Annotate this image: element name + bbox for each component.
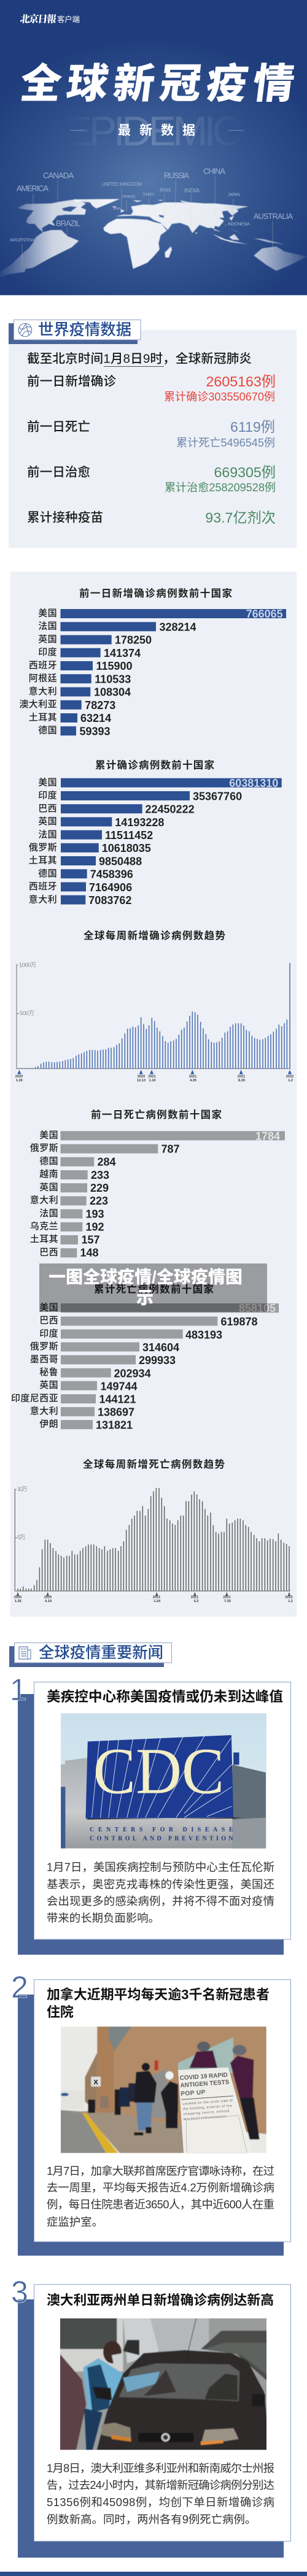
bar chart: cumulative deaths top ten: 巴西 xyxy=(39,1316,58,1326)
photo: CDC sign: CDC xyxy=(93,1735,224,1807)
stat: deaths: 前一日死亡 xyxy=(27,420,90,434)
chart: weekly new cases trend: 4.25 xyxy=(190,1079,196,1083)
bar chart: cumulative cases top ten: 60381310 xyxy=(229,777,278,789)
photo: testing queue: X xyxy=(93,2079,98,2087)
bar chart: daily deaths top ten: 俄罗斯 xyxy=(30,1143,58,1154)
stat: new confirmed: 2605163例 xyxy=(206,374,276,389)
bar chart: daily deaths top ten xyxy=(30,1108,285,1259)
bar chart: cumulative cases top ten: 累计确诊病例数前十国家 xyxy=(95,759,215,771)
chart: weekly deaths trend: 5万 xyxy=(17,1535,26,1541)
chart: weekly deaths trend: 1.24 xyxy=(154,1600,161,1603)
bar chart: daily deaths top ten: 193 xyxy=(86,1208,104,1220)
bar chart: daily new cases top ten: 78273 xyxy=(85,699,115,711)
bar chart: daily deaths top ten: 德国 xyxy=(39,1156,58,1167)
bar chart: cumulative deaths top ten: 英国 xyxy=(39,1380,58,1390)
watermark: EPIDEMIC xyxy=(64,108,243,155)
bar chart: daily deaths top ten: 美国 xyxy=(39,1130,58,1141)
chart: weekly deaths trend: 全球每周新增死亡病例数趋势 xyxy=(83,1458,225,1470)
bar chart: daily new cases top ten: 328214 xyxy=(160,621,196,633)
bar chart: daily new cases top ten: 178250 xyxy=(115,634,152,646)
card title: 澳大利亚两州单日新增确诊病例达新高 xyxy=(47,2293,274,2307)
panel: charts xyxy=(10,572,297,1617)
chart: weekly deaths trend: 1.26 xyxy=(15,1600,21,1603)
card title: 加拿大近期平均每天逾3千名新冠患者 xyxy=(47,1987,270,2002)
bar chart: cumulative cases top ten: 35367760 xyxy=(193,790,242,802)
stat: new confirmed xyxy=(27,374,276,403)
bar chart: daily deaths top ten: 英国 xyxy=(39,1182,58,1192)
logo xyxy=(20,12,80,25)
chart: weekly deaths trend: 7.25 xyxy=(224,1600,231,1603)
bar chart: daily deaths top ten: 229 xyxy=(90,1182,109,1194)
map country labels: RUSSIA xyxy=(164,171,189,180)
bar chart: daily new cases top ten: 西班牙 xyxy=(29,660,57,671)
card body text: 会出现更多的感染病例，并将不得不面对疫情 xyxy=(47,1895,274,1907)
hero banner xyxy=(0,0,307,296)
stat: recovered: 669305例 xyxy=(214,464,276,480)
map country labels: CANADA xyxy=(43,171,74,180)
card body text: 基表示，奥密克戎毒株的传染性更强，美国还 xyxy=(47,1878,274,1890)
chart: weekly new cases trend: 2021 xyxy=(189,1075,196,1078)
bar chart: cumulative deaths top ten xyxy=(11,1283,279,1432)
bar chart: daily new cases top ten: 110533 xyxy=(95,673,131,686)
chart: weekly new cases trend: 2022 xyxy=(286,1075,293,1078)
bar chart: daily new cases top ten: 141374 xyxy=(104,647,141,659)
bar chart: daily deaths top ten: 巴西 xyxy=(39,1247,58,1257)
card title xyxy=(47,1987,270,2020)
bar chart: daily deaths top ten: 前一日死亡病例数前十国家 xyxy=(91,1108,222,1121)
card body text: 症监护室。 xyxy=(47,2215,103,2228)
bar chart: cumulative cases top ten: 7164906 xyxy=(89,881,132,894)
bar chart: daily deaths top ten: 157 xyxy=(81,1234,100,1246)
card title: 住院 xyxy=(47,2004,74,2020)
bar chart: cumulative cases top ten: 14193228 xyxy=(115,816,164,829)
map country labels xyxy=(10,167,293,267)
bar chart: cumulative cases top ten: 西班牙 xyxy=(29,881,57,892)
chart: weekly deaths trend: 2020 xyxy=(44,1596,52,1600)
main title: 全球新冠疫情 xyxy=(18,61,303,107)
bar chart: cumulative deaths top ten: 131821 xyxy=(96,1419,133,1432)
card body text xyxy=(47,2164,274,2228)
bar chart: cumulative cases top ten: 英国 xyxy=(38,816,57,827)
map country labels: JAPAN xyxy=(228,193,240,197)
chart: weekly new cases trend: 1.2 xyxy=(288,1079,293,1083)
stat: new confirmed: 前一日新增确诊 xyxy=(27,374,116,389)
bar chart: daily new cases top ten: 766065 xyxy=(246,608,283,620)
stat: new confirmed: 累计确诊303550670例 xyxy=(164,391,275,403)
stat: vaccines: 累计接种疫苗 xyxy=(27,510,103,525)
card body text: 告，过去24小时内，其新增新冠确诊病例分别达 xyxy=(47,2478,274,2491)
news card 2 xyxy=(11,1970,291,2256)
stat: recovered: 前一日治愈 xyxy=(27,465,90,480)
overlay caption banner: 示 xyxy=(136,1288,154,1308)
map country labels: INDIA xyxy=(184,188,200,194)
bar chart: cumulative cases top ten: 印度 xyxy=(38,791,57,801)
bar chart: cumulative cases top ten: 法国 xyxy=(38,829,57,840)
bar chart: cumulative cases top ten xyxy=(29,759,282,907)
bar chart: daily deaths top ten: 土耳其 xyxy=(30,1234,58,1244)
bar chart: cumulative deaths top ten: 619878 xyxy=(221,1316,258,1328)
stat: vaccines xyxy=(27,510,276,526)
card body text: 例数新高。同时，两州各有9例死亡病例。 xyxy=(47,2513,256,2526)
bar chart: cumulative deaths top ten: 202934 xyxy=(114,1367,151,1379)
chart: weekly new cases trend: 全球每周新增确诊病例数趋势 xyxy=(84,929,226,941)
bar chart: daily deaths top ten: 284 xyxy=(97,1156,116,1168)
date line: 截至北京时间1月8日9时，全球新冠肺炎 xyxy=(27,352,252,366)
stat: deaths: 累计死亡5496545例 xyxy=(176,437,275,449)
card body text xyxy=(47,2462,274,2526)
chart: weekly new cases trend: 2020 xyxy=(15,1075,23,1078)
card number: 1 xyxy=(10,1673,27,1707)
bar chart: daily new cases top ten: 108304 xyxy=(94,686,131,699)
footer bar xyxy=(0,2572,307,2576)
stat: deaths: 6119例 xyxy=(230,419,275,435)
section heading: global news: NEWS xyxy=(20,1648,27,1650)
stat: recovered xyxy=(27,464,276,494)
bar chart: cumulative deaths top ten: 314604 xyxy=(142,1341,179,1354)
map country labels: INDONESIA xyxy=(228,221,250,227)
icon: newspaper xyxy=(19,1647,31,1659)
map country labels: AMERICA xyxy=(17,184,49,193)
card body text: 例，每日住院患者近3650人，其中近600人在重 xyxy=(47,2198,274,2210)
bar chart: cumulative cases top ten: 11511452 xyxy=(105,829,153,841)
stat: deaths xyxy=(27,419,275,449)
bar chart: daily deaths top ten: 1784 xyxy=(255,1130,280,1142)
bar chart: cumulative cases top ten: 意大利 xyxy=(29,894,57,905)
chart: weekly deaths trend: 2022 xyxy=(285,1596,293,1600)
news card 3 xyxy=(11,2275,291,2558)
card body text: 1月7日，美国疾病控制与预防中心主任瓦伦斯 xyxy=(47,1861,274,1873)
bar chart: cumulative deaths top ten: 美国 xyxy=(39,1301,58,1313)
bar chart: daily deaths top ten: 意大利 xyxy=(30,1195,58,1206)
card body text: 51356例和45098例，均创下单日新增确诊病 xyxy=(47,2496,274,2509)
news card 1 xyxy=(10,1673,291,1955)
section heading: global news xyxy=(9,1643,172,1667)
section heading: world data xyxy=(9,320,141,344)
card title: 美疾控中心称美国疫情或仍未到达峰值 xyxy=(47,1689,283,1704)
bar chart: cumulative deaths top ten: 墨西哥 xyxy=(30,1354,58,1365)
card body text: 1月8日，澳大利亚维多利亚州和新南威尔士州报 xyxy=(47,2462,274,2474)
panel: world data xyxy=(9,320,297,548)
photo: testing queue: the building, exterior of the xyxy=(183,2104,232,2111)
chart: weekly deaths trend: 2021 xyxy=(153,1596,160,1600)
bar chart: daily new cases top ten: 澳大利亚 xyxy=(19,699,57,710)
logo: 北京日報 xyxy=(20,12,57,25)
stat: vaccines: 93.7亿剂次 xyxy=(205,510,276,526)
map country labels: BRAZIL xyxy=(56,218,80,228)
bar chart: daily new cases top ten: 土耳其 xyxy=(29,713,57,723)
bar chart: cumulative cases top ten: 美国 xyxy=(38,776,57,788)
bar chart: cumulative deaths top ten: 俄罗斯 xyxy=(30,1341,58,1352)
bar chart: cumulative deaths top ten: 299933 xyxy=(139,1354,176,1367)
photo: testing queue: Marshall's/Homesense. xyxy=(184,2115,228,2122)
chart: weekly new cases trend: 1.26 xyxy=(16,1079,23,1083)
bar chart: daily new cases top ten: 印度 xyxy=(38,647,57,657)
logo: 客户端 xyxy=(57,15,80,24)
chart: weekly deaths trend: 10万 xyxy=(17,1486,28,1493)
world map xyxy=(0,199,307,277)
bar chart: daily deaths top ten: 越南 xyxy=(39,1169,58,1179)
bar chart: daily new cases top ten: 英国 xyxy=(38,634,57,645)
chart: weekly deaths trend: 1.2 xyxy=(288,1600,293,1603)
chart: weekly new cases trend: 1000万 xyxy=(19,962,36,969)
bar chart: cumulative deaths top ten: 秘鲁 xyxy=(39,1367,58,1378)
bar chart: cumulative cases top ten: 9850488 xyxy=(99,855,142,867)
bar chart: cumulative cases top ten: 22450222 xyxy=(145,803,195,816)
bar chart: cumulative deaths top ten: 伊朗 xyxy=(39,1419,58,1429)
bar chart: cumulative deaths top ten: 144121 xyxy=(99,1393,136,1406)
bar chart: daily deaths top ten: 787 xyxy=(161,1143,180,1156)
photo: CDC sign: CONTROL AND PREVENTION xyxy=(90,1836,233,1842)
bar chart: cumulative cases top ten: 7083762 xyxy=(88,894,131,907)
map country labels: IRAN xyxy=(160,188,171,193)
chart: weekly new cases trend: 8.29 xyxy=(238,1079,245,1083)
bar chart: daily deaths top ten: 乌克兰 xyxy=(30,1221,58,1232)
map country labels: UNITED KINGDOM xyxy=(102,182,142,187)
bar chart: daily deaths top ten: 233 xyxy=(91,1169,109,1181)
bar chart: cumulative cases top ten: 土耳其 xyxy=(29,856,57,866)
section heading: world data: 世界疫情数据 xyxy=(38,321,131,339)
card number: 2 xyxy=(11,1970,28,2004)
bar chart: cumulative deaths top ten: 483193 xyxy=(185,1328,222,1341)
bar chart: daily deaths top ten: 法国 xyxy=(39,1208,58,1219)
chart: weekly deaths trend: 4.19 xyxy=(45,1600,52,1603)
bar chart: daily new cases top ten: 前一日新增确诊病例数前十国家 xyxy=(79,587,232,599)
bar chart: daily deaths top ten: 192 xyxy=(86,1221,104,1233)
chart: weekly deaths trend xyxy=(14,1458,293,1603)
bar chart: cumulative cases top ten: 俄罗斯 xyxy=(29,843,57,853)
map country labels: FRANCE xyxy=(122,195,136,199)
overlay caption banner xyxy=(39,1263,267,1312)
bar chart: cumulative cases top ten: 7458396 xyxy=(90,868,133,881)
bar chart: daily new cases top ten: 59393 xyxy=(80,725,111,737)
photo: testing queue: shopping centre, behind xyxy=(183,2109,230,2117)
chart: weekly new cases trend: 12.13 xyxy=(137,1079,146,1083)
chart: weekly deaths trend: 2021 xyxy=(191,1596,198,1600)
section heading: global news: 全球疫情重要新闻 xyxy=(39,1644,163,1662)
chart: weekly new cases trend xyxy=(15,929,293,1083)
card number: 3 xyxy=(11,2275,28,2309)
chart: weekly deaths trend: 2020 xyxy=(14,1596,21,1600)
bar chart: daily new cases top ten: 115900 xyxy=(96,660,133,672)
photo: testing queue xyxy=(61,2026,266,2153)
photo: drive-through testing xyxy=(60,2318,266,2450)
map country labels: CHINA xyxy=(203,167,225,175)
card body text: 去一周里，平均每天报告近4.2万例新增确诊病 xyxy=(47,2181,274,2194)
chart: weekly deaths trend: 2021 xyxy=(223,1596,231,1600)
bar chart: daily deaths top ten: 148 xyxy=(80,1246,99,1259)
chart: weekly new cases trend: 500万 xyxy=(20,1010,34,1017)
bar chart: daily new cases top ten: 德国 xyxy=(38,725,57,736)
photo: CDC sign: CENTERS FOR DISEASE xyxy=(90,1827,233,1833)
chart: weekly deaths trend: 5.2 xyxy=(194,1600,198,1603)
chart: weekly new cases trend: 1.10 xyxy=(149,1079,155,1083)
map country labels: ARGENTINA xyxy=(10,237,35,243)
bar chart: daily new cases top ten: 意大利 xyxy=(29,686,57,697)
bar chart: cumulative deaths top ten: 858105 xyxy=(239,1302,276,1314)
photo: testing queue: POP UP xyxy=(181,2089,206,2098)
bar chart: cumulative cases top ten: 德国 xyxy=(38,868,57,879)
bar chart: cumulative deaths top ten: 意大利 xyxy=(30,1406,58,1417)
bar chart: cumulative deaths top ten: 印度 xyxy=(39,1328,58,1339)
bar chart: daily new cases top ten xyxy=(19,587,286,737)
photo: testing queue: ANTIGEN TESTS xyxy=(180,2079,230,2089)
stat: recovered: 累计治愈258209528例 xyxy=(165,481,276,494)
overlay caption banner: 一图全球疫情/全球疫情图 xyxy=(49,1267,243,1287)
chart: weekly new cases trend: 2021 xyxy=(148,1075,156,1078)
map country labels: SPAIN xyxy=(113,207,121,211)
photo: testing queue: COVID 19 RAPID xyxy=(179,2072,228,2082)
bar chart: daily deaths top ten: 223 xyxy=(90,1195,108,1207)
bar chart: daily new cases top ten: 阿根廷 xyxy=(29,673,57,684)
card body text xyxy=(47,1861,274,1925)
photo: CDC sign xyxy=(61,1713,266,1849)
bar chart: daily new cases top ten: 美国 xyxy=(38,607,57,618)
bar chart: cumulative deaths top ten: 累计死亡病例数前十国家 xyxy=(94,1283,214,1295)
icon: globe xyxy=(18,323,32,337)
bar chart: daily new cases top ten: 63214 xyxy=(80,712,111,724)
photo: testing queue: Located on the north side of xyxy=(182,2099,233,2106)
chart: weekly new cases trend: 2021 xyxy=(238,1075,245,1078)
bar chart: daily new cases top ten: 法国 xyxy=(38,621,57,632)
bar chart: cumulative deaths top ten: 149744 xyxy=(101,1380,138,1392)
card body text: 1月7日，加拿大联邦首席医疗官谭咏诗称，在过 xyxy=(47,2164,274,2177)
map country labels: AUSTRALIA xyxy=(254,212,293,221)
bar chart: cumulative cases top ten: 巴西 xyxy=(38,803,57,814)
bar chart: cumulative cases top ten: 10618035 xyxy=(102,842,151,854)
card body text: 带来的长期负面影响。 xyxy=(47,1911,160,1925)
subtitle: 最新数据 xyxy=(118,123,204,137)
bar chart: cumulative deaths top ten: 印度尼西亚 xyxy=(11,1393,58,1403)
chart: weekly new cases trend: 2020 xyxy=(138,1075,145,1078)
bar chart: cumulative deaths top ten: 138697 xyxy=(98,1406,134,1418)
map country labels: TURKEY xyxy=(142,193,155,197)
